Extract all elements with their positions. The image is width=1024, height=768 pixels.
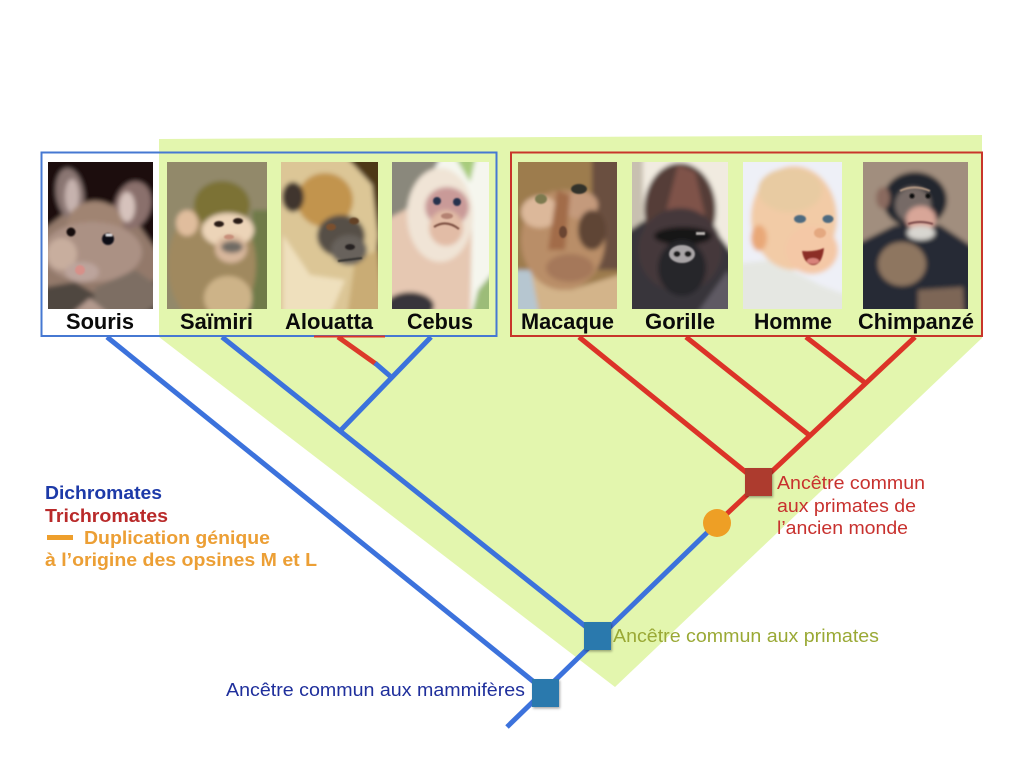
branch: gorille [686, 337, 809, 435]
panel: trichromates frame [511, 152, 982, 336]
panel: primates green background [159, 135, 982, 687]
node: duplication genique [703, 509, 731, 537]
node: ancetre mammiferes [532, 679, 559, 707]
photo: cebus [392, 162, 489, 309]
branch: root stem dichromate [507, 523, 717, 727]
branch: souris [107, 337, 534, 682]
photo: homme [743, 162, 842, 309]
text: ancetre ancien monde: l’ancien monde [777, 517, 908, 538]
legend [45, 482, 317, 570]
branch: alouatta [338, 337, 390, 376]
photo: alouatta [281, 162, 378, 309]
text: ancetre primates: Ancêtre commun aux primates [613, 625, 879, 646]
legend: orange dash [47, 535, 73, 540]
label: Alouatta: Alouatta [285, 309, 374, 334]
photo: chimpanze [863, 162, 968, 309]
photo: gorille [632, 162, 728, 309]
node: ancetre primates [584, 622, 611, 650]
label: Homme: Homme [754, 309, 832, 334]
branch: saimiri [222, 337, 590, 630]
photo: macaque [518, 162, 617, 309]
label: Gorille: Gorille [645, 309, 715, 334]
label: Cebus: Cebus [407, 309, 473, 334]
photo: saimiri [167, 162, 267, 309]
branch: macaque [579, 337, 758, 482]
red frame segment under Alouatta [314, 336, 385, 338]
photo: souris [48, 162, 153, 309]
panel: dichromates frame [42, 152, 496, 336]
label: Souris: Souris [66, 309, 134, 334]
species labels [66, 309, 974, 334]
legend: duplication genique: Duplication génique [84, 527, 270, 548]
legend: dichromates: Dichromates [45, 482, 162, 503]
text: ancetre ancien monde [777, 472, 925, 538]
phylogenetic tree [107, 337, 915, 727]
text: ancetre ancien monde: Ancêtre commun [777, 472, 925, 493]
text: ancetre mammiferes: Ancêtre commun aux mammifères [226, 679, 525, 700]
branch: stem trichromate [717, 337, 915, 523]
branch: homme [806, 337, 864, 382]
label: Saïmiri: Saïmiri [180, 309, 253, 334]
label: Macaque: Macaque [521, 309, 614, 334]
legend: trichromates: Trichromates [45, 505, 168, 526]
legend: origine des opsines: à l’origine des opsines M et L [45, 549, 317, 570]
branch: cebus [340, 337, 431, 431]
node: ancetre ancien monde [745, 468, 772, 496]
label: Chimpanzé: Chimpanzé [858, 309, 974, 334]
text: ancetre ancien monde: aux primates de [777, 495, 916, 516]
